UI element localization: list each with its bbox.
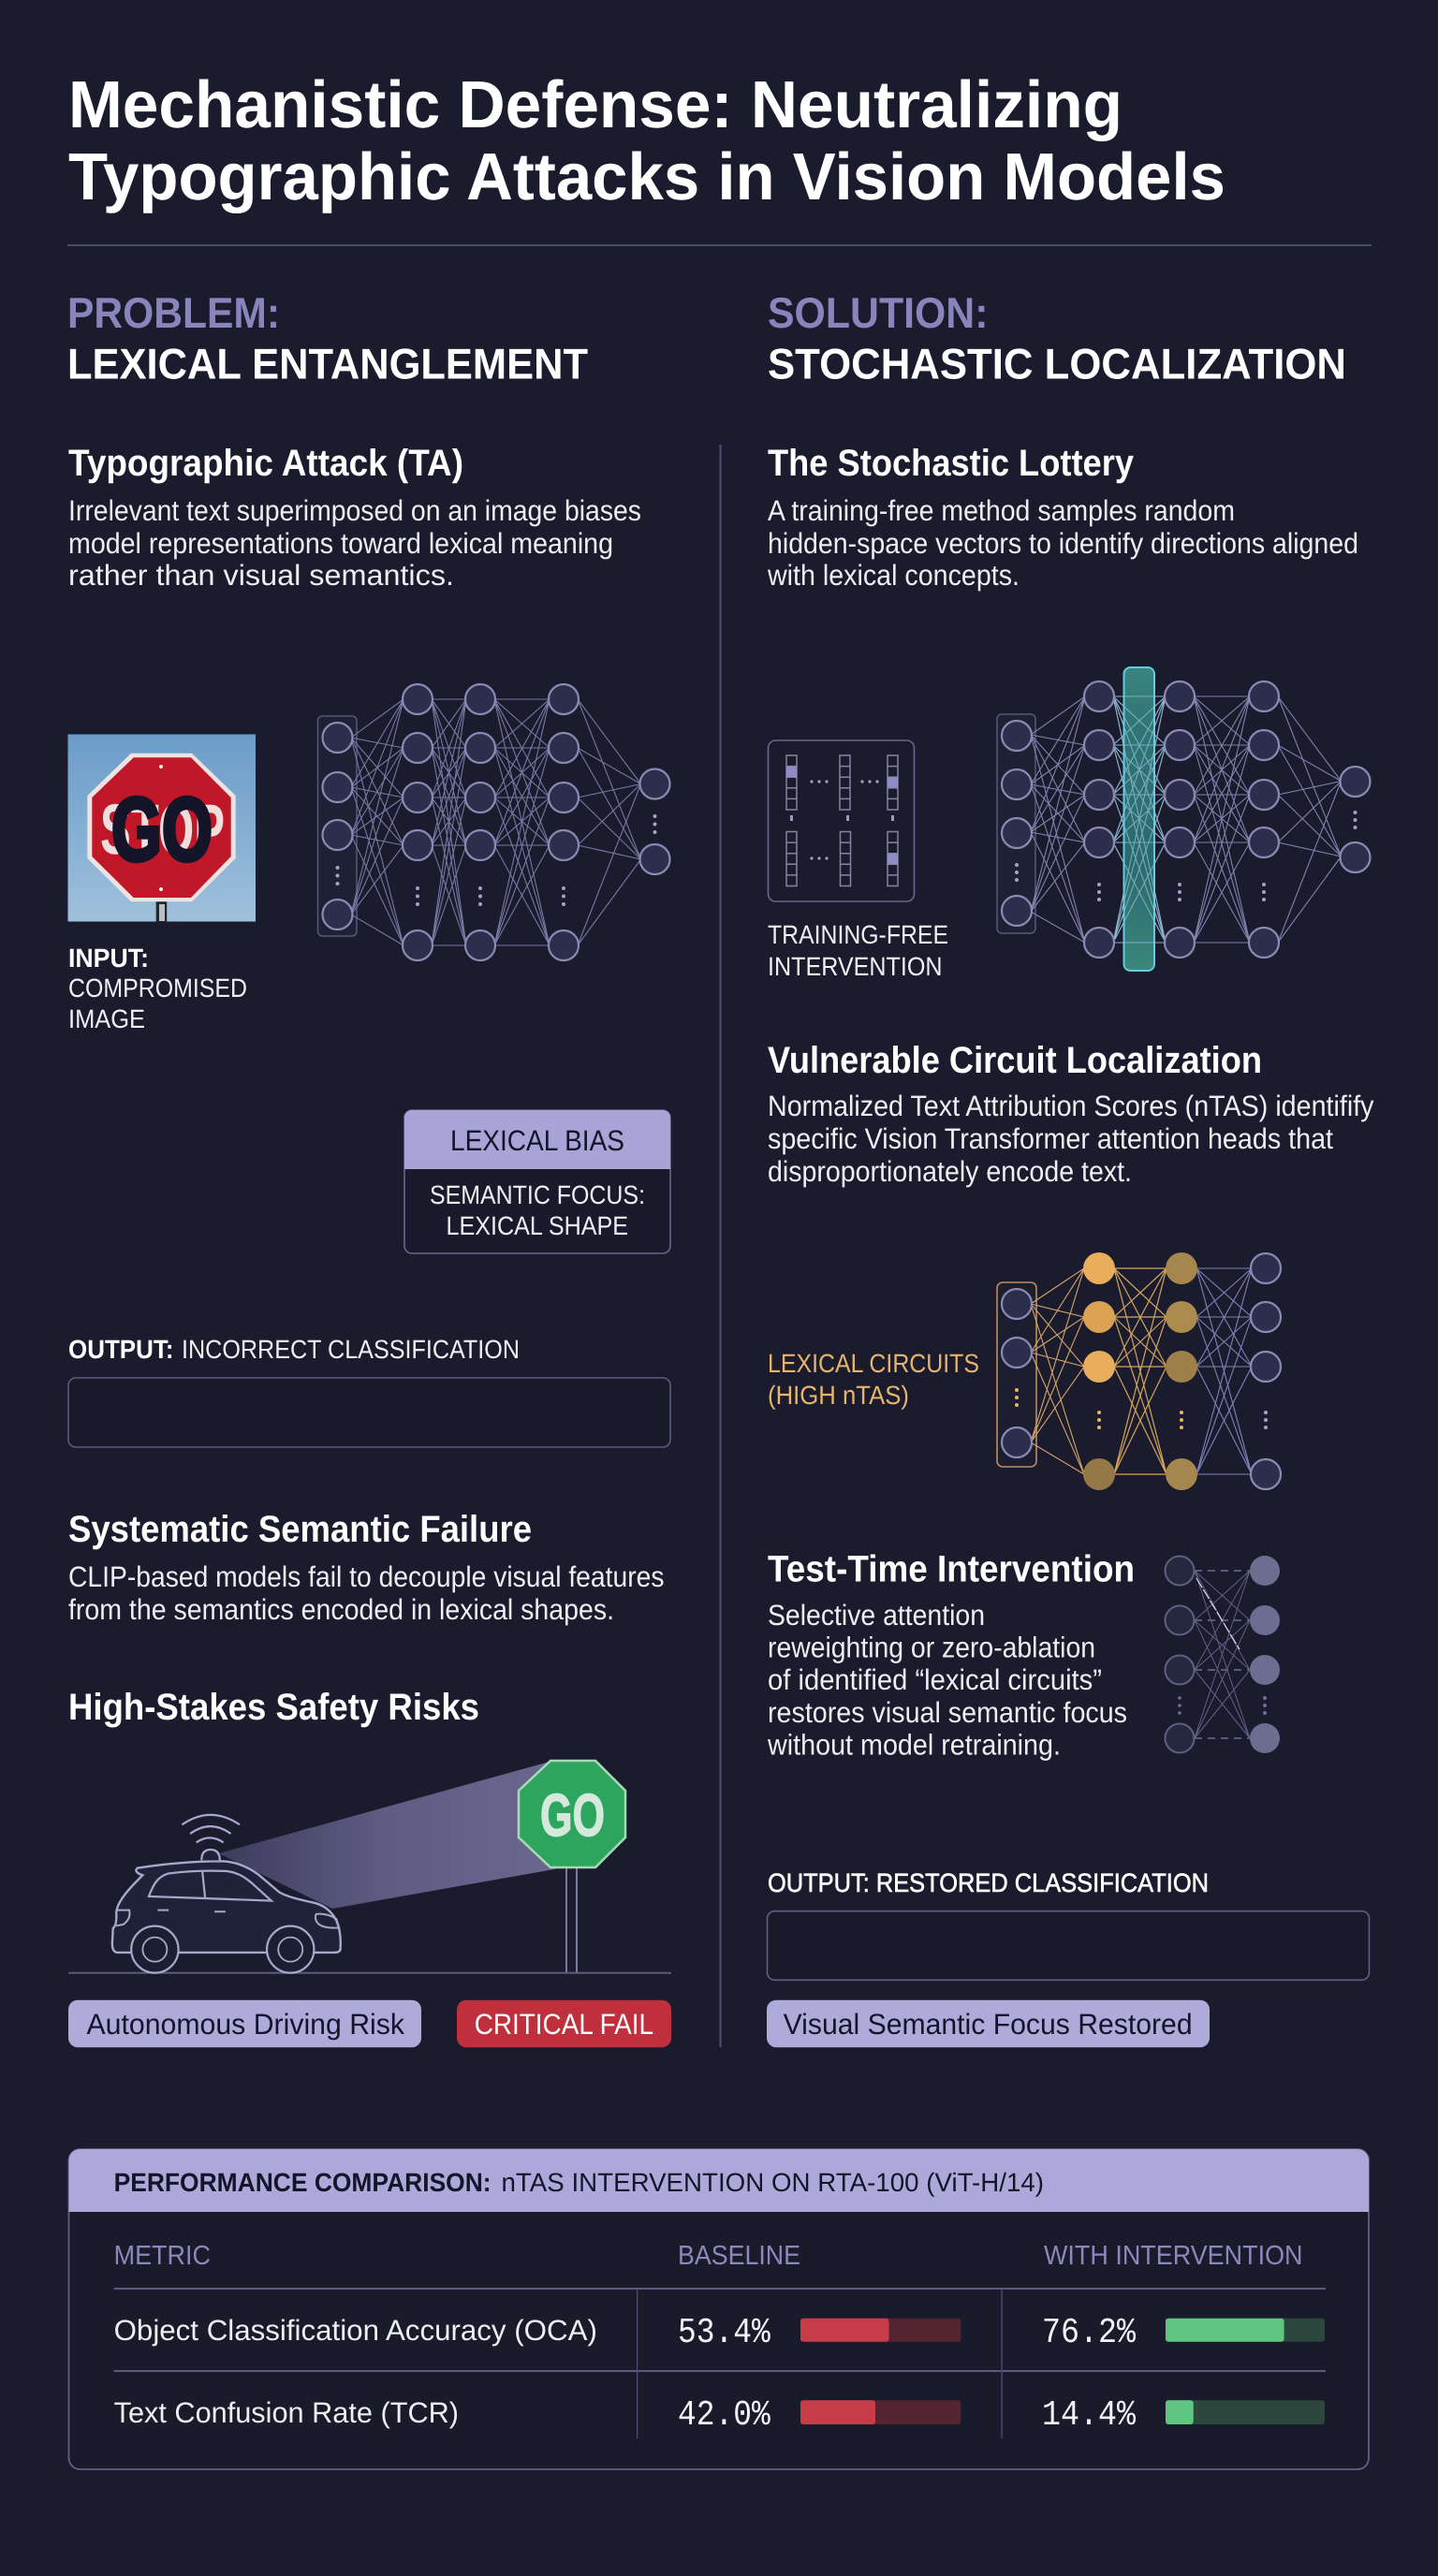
neural network diagram: lexical circuits [997,1252,1281,1490]
text block: vulnerable circuit localization [768,1040,1374,1188]
text block: test-time intervention: Selective attention [768,1599,985,1632]
table row: object classification accuracy: 76.2% [1042,2313,1136,2353]
table header bar: PERFORMANCE COMPARISON: [114,2168,492,2197]
text block: vulnerable circuit localization: Vulnerable Circuit Localization [768,1040,1262,1081]
table column headers: BASELINE [678,2241,800,2271]
table column headers [114,2241,1303,2271]
label: input compromised image: INPUT: [68,944,149,973]
panel: problem column [67,288,671,2047]
label: input compromised image [68,944,247,1033]
table row: object classification accuracy: 53.4% [678,2313,770,2353]
heading: solution: SOLUTION: [768,288,989,337]
heading: problem [67,288,588,388]
neural network diagram: highlighted layer [997,667,1371,971]
text block: test-time intervention: reweighting or zero-ablation [768,1631,1095,1664]
label: lexical circuits [768,1349,979,1410]
icon: compromised stop sign image: STOP [100,790,225,870]
heading: solution: STOCHASTIC LOCALIZATION [768,339,1346,388]
output: restored classification [768,1868,1369,1980]
illustration: car misreading GO sign [68,1761,671,1974]
text block: typographic attack: Typographic Attack (TA) [68,443,463,484]
text block: typographic attack: rather than visual semantics. [68,559,454,592]
text block: the stochastic lottery [767,443,1358,592]
output: incorrect classification: OUTPUT: [68,1335,174,1364]
heading: high-stakes safety risks: High-Stakes Safety Risks [68,1687,479,1728]
table header bar: nTAS INTERVENTION ON RTA-100 (ViT-H/14) [502,2168,1044,2197]
table row: text confusion rate: 42.0% [678,2395,770,2436]
table row: text confusion rate [114,2395,1325,2436]
callout: lexical bias: LEXICAL SHAPE [446,1211,628,1240]
table row: text confusion rate: Text Confusion Rate (TCR) [114,2396,459,2429]
text block: vulnerable circuit localization: Normalized Text Attribution Scores (nTAS) identifify [768,1090,1374,1122]
table column headers: METRIC [114,2241,211,2271]
text block: test-time intervention [767,1548,1135,1762]
icon: compromised stop sign image [67,734,256,921]
callout: lexical bias: LEXICAL BIAS [450,1124,624,1157]
text block: test-time intervention: Test-Time Intervention [768,1548,1135,1589]
text block: test-time intervention: of identified “lexical circuits” [768,1663,1102,1696]
callout: lexical bias [404,1110,670,1253]
table row: object classification accuracy: Object Classification Accuracy (OCA) [114,2314,597,2347]
neural network diagram: ablated circuits [1165,1556,1280,1753]
label: training-free intervention: TRAINING-FREE [768,920,948,949]
text block: typographic attack: model representations toward lexical meaning [68,527,613,560]
tag: autonomous driving risk [68,2000,421,2047]
text block: the stochastic lottery: hidden-space vectors to identify directions aligned [768,527,1358,560]
icon: random hidden-space vectors [768,740,914,901]
callout: lexical bias: SEMANTIC FOCUS: [430,1180,645,1209]
tag: autonomous driving risk: Autonomous Driving Risk [86,2008,404,2041]
label: lexical circuits: LEXICAL CIRCUITS [768,1349,979,1378]
table row: text confusion rate: 14.4% [1042,2395,1136,2436]
text block: test-time intervention: without model retraining. [767,1728,1061,1762]
heading: problem: LEXICAL ENTANGLEMENT [67,339,588,388]
highlight: teal attention layer [1123,667,1154,971]
label: lexical circuits: (HIGH nTAS) [768,1381,909,1410]
text block: the stochastic lottery: with lexical concepts. [767,559,1020,592]
text block: vulnerable circuit localization: disproportionately encode text. [768,1155,1132,1188]
label: training-free intervention: INTERVENTION [768,952,942,981]
text block: systematic semantic failure: from the semantics encoded in lexical shapes. [68,1593,614,1626]
text block: typographic attack [68,443,641,592]
text block: the stochastic lottery: A training-free method samples random [768,494,1235,527]
icon: compromised stop sign image: GO [111,780,213,880]
label: training-free intervention [768,920,948,981]
tag: visual semantic focus restored: Visual Semantic Focus Restored [784,2008,1193,2041]
text block: systematic semantic failure: CLIP-based models fail to decouple visual features [68,1560,665,1593]
output: incorrect classification [68,1335,670,1447]
heading: problem: PROBLEM: [67,288,280,337]
title: Mechanistic Defense: Neutralizing [68,68,1123,142]
neural network diagram: baseline [318,684,670,960]
text block: test-time intervention: restores visual semantic focus [768,1696,1127,1729]
text block: systematic semantic failure [68,1509,665,1626]
text block: systematic semantic failure: Systematic Semantic Failure [68,1509,532,1550]
tag: critical fail [457,2000,671,2047]
output: incorrect classification: INCORRECT CLASSIFICATION [182,1335,520,1364]
text block: typographic attack: Irrelevant text superimposed on an image biases [68,494,641,527]
panel: performance comparison table [69,2149,1369,2469]
label: input compromised image: COMPROMISED [68,973,247,1003]
label: input compromised image: IMAGE [68,1004,145,1033]
title: Typographic Attacks in Vision Models [68,140,1225,214]
heading: solution [768,288,1346,388]
table header bar [69,2149,1369,2212]
output: restored classification: OUTPUT: RESTORED CLASSIFICATION [768,1868,1209,1897]
table row: object classification accuracy [114,2313,1325,2353]
illustration: car misreading GO sign: GO [540,1781,605,1849]
tag: visual semantic focus restored [767,2000,1210,2047]
text block: the stochastic lottery: The Stochastic Lottery [768,443,1135,484]
title [68,68,1225,214]
panel: solution column [767,288,1374,2047]
table column headers: WITH INTERVENTION [1044,2241,1303,2271]
text block: vulnerable circuit localization: specific Vision Transformer attention heads that [768,1122,1333,1155]
tag: critical fail: CRITICAL FAIL [475,2008,653,2041]
